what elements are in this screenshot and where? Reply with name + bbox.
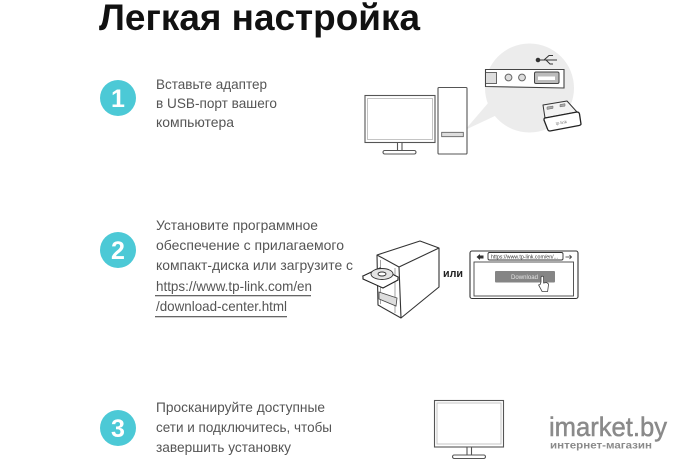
step 1 text: компьютера <box>156 114 234 130</box>
step 1 badge <box>100 80 136 116</box>
label: or: или <box>443 268 463 280</box>
monitor <box>365 96 435 154</box>
USB adapter <box>543 101 581 131</box>
illustration: computer with USB adapter <box>365 44 581 154</box>
forward arrow <box>566 255 572 259</box>
step 2 text <box>155 217 353 317</box>
step 1 text: в USB-порт вашего <box>156 95 277 111</box>
cursor hand <box>539 276 549 292</box>
CD tray <box>363 268 398 288</box>
monitor 3 <box>434 400 504 458</box>
step 1 badge: 1 <box>111 85 125 113</box>
USB port panel <box>486 70 564 88</box>
step 1 text <box>156 76 277 130</box>
USB adapter: tp-link <box>555 119 568 126</box>
step 3 badge <box>100 410 136 446</box>
step 3 text: Просканируйте доступные <box>156 399 325 415</box>
download link <box>155 278 312 317</box>
computer tower <box>438 88 467 154</box>
watermark: интернет-магазин <box>550 440 652 452</box>
address bar: https://www.tp-link.com/en/... <box>491 254 558 260</box>
zoom callout circle <box>465 44 574 132</box>
illustration: PC with CD drive <box>363 241 439 318</box>
watermark: imarket.by <box>549 412 667 442</box>
download link: /download-center.html <box>156 298 287 314</box>
step 3 text: завершить установку <box>156 439 291 455</box>
download link: https://www.tp-link.com/en <box>156 278 312 294</box>
step 2 text: компакт-диска или загрузите с <box>156 257 353 273</box>
browser window <box>470 251 578 298</box>
download button: Download <box>511 274 538 281</box>
step 3 text <box>156 399 332 455</box>
step 1 text: Вставьте адаптер <box>156 76 267 92</box>
step 3 text: сети и подключитесь, чтобы <box>156 419 332 435</box>
step 2 badge: 2 <box>111 237 125 265</box>
step 2 badge <box>100 232 136 268</box>
back arrow <box>476 254 484 260</box>
USB symbol <box>536 56 557 64</box>
step 2 text: Установите программное <box>156 217 318 233</box>
step 2 text: обеспечение с прилагаемого <box>156 237 344 253</box>
step 3 badge: 3 <box>111 415 125 443</box>
